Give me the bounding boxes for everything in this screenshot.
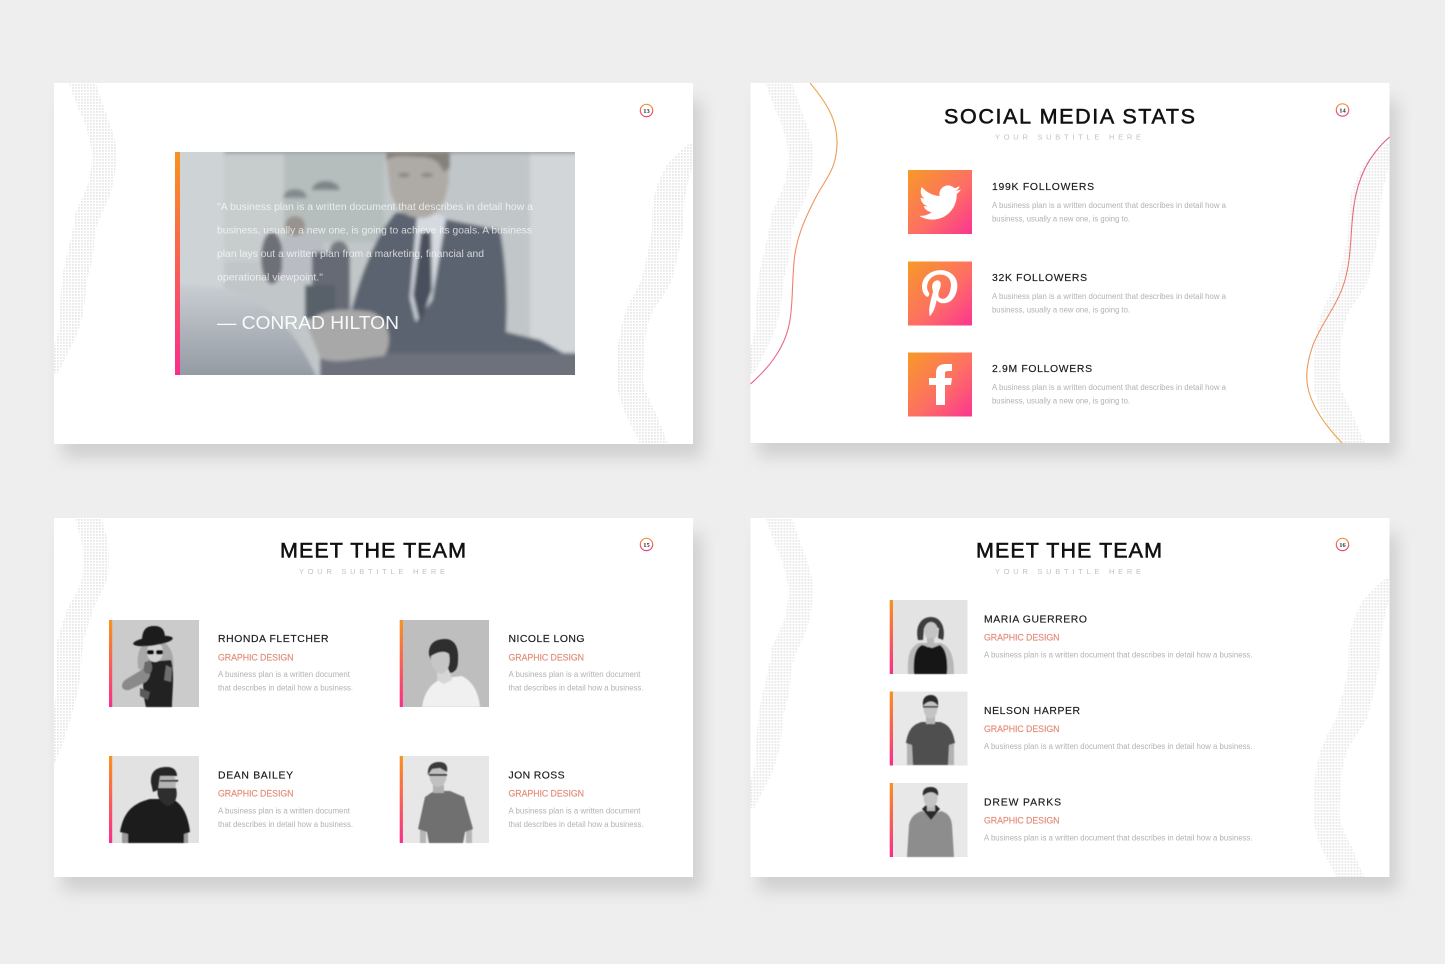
stat: facebook (908, 352, 1227, 416)
page number 14 (1336, 104, 1349, 116)
page number 13 (640, 104, 653, 117)
stat: facebook: A business plan is a written document that describes in detail how a (992, 383, 1227, 392)
icon: facebook (908, 352, 972, 416)
team member: Nicole Long: A business plan is a written document (508, 670, 641, 679)
team member: Rhonda Fletcher: RHONDA FLETCHER (218, 634, 329, 645)
page number 13: 13 (643, 108, 650, 115)
quote text (217, 201, 533, 284)
portrait (112, 620, 199, 707)
team member: Dean Bailey (109, 756, 353, 843)
panel: slide 16 meet the team (750, 518, 1390, 877)
decorative curve right (1307, 137, 1390, 443)
stat: pinterest: 32K FOLLOWERS (992, 273, 1087, 284)
accent bar (890, 600, 893, 674)
accent bar (109, 620, 112, 707)
blurred office photo (180, 152, 575, 375)
portrait (893, 692, 968, 766)
team member: Rhonda Fletcher: GRAPHIC DESIGN (218, 652, 294, 662)
team member: Nelson Harper: GRAPHIC DESIGN (984, 724, 1060, 734)
stat: facebook: 2.9M FOLLOWERS (992, 364, 1092, 375)
stat: facebook: business, usually a new one, is going to. (992, 397, 1130, 406)
subtitle: YOUR SUBTITLE HERE (299, 567, 445, 576)
quote text: operational viewpoint." (217, 272, 323, 284)
team member: Dean Bailey: that describes in detail how a business. (218, 820, 353, 829)
page number 15 (640, 538, 653, 551)
accent bar (890, 692, 893, 766)
team member: Maria Guerrero: MARIA GUERRERO (984, 614, 1087, 625)
stat: twitter: business, usually a new one, is going to. (992, 215, 1130, 224)
heading: SOCIAL MEDIA STATS (944, 105, 1195, 129)
subtitle: YOUR SUBTITLE HERE (995, 132, 1141, 142)
team member: Nicole Long (400, 620, 644, 707)
icon: twitter (908, 170, 972, 234)
quote text: business, usually a new one, is going to achieve its goals. A business (217, 224, 532, 236)
team member: Nelson Harper: NELSON HARPER (984, 706, 1080, 717)
accent bar (400, 620, 403, 707)
team member: Drew Parks: GRAPHIC DESIGN (984, 816, 1060, 826)
team member: Nicole Long: that describes in detail how a business. (508, 684, 644, 693)
quote author: — CONRAD HILTON (217, 312, 399, 333)
team member: Drew Parks: A business plan is a written document that describes in detail how a business. (984, 834, 1252, 843)
icon: pinterest (908, 262, 972, 326)
team member: Maria Guerrero: A business plan is a written document that describes in detail how a business. (984, 651, 1252, 660)
stat: pinterest (908, 262, 1227, 326)
quote card with photo (175, 152, 575, 375)
portrait (402, 620, 489, 707)
quote text: "A business plan is a written document that describes in detail how a (217, 201, 533, 213)
accent bar (109, 756, 112, 843)
team member: Nelson Harper: A business plan is a written document that describes in detail how a business. (984, 742, 1252, 751)
team member: Nicole Long: NICOLE LONG (508, 634, 584, 645)
team member: Jon Ross: that describes in detail how a business. (508, 820, 644, 829)
quote text: plan lays out a written plan from a marketing, financial and (217, 248, 484, 260)
stat: pinterest: business, usually a new one, is going to. (992, 306, 1130, 315)
team member: Jon Ross: JON ROSS (508, 770, 565, 781)
team member: Nelson Harper (890, 692, 1252, 766)
stat: pinterest: A business plan is a written document that describes in detail how a (992, 292, 1227, 301)
portrait (893, 783, 968, 857)
panel: slide 15 meet the team (54, 518, 693, 877)
team member: Jon Ross: A business plan is a written document (508, 807, 641, 816)
stat: twitter: 199K FOLLOWERS (992, 182, 1094, 193)
page number 14: 14 (1339, 107, 1346, 114)
team member: Maria Guerrero (890, 600, 1252, 674)
accent bar (890, 783, 893, 857)
heading: MEET THE TEAM (280, 539, 466, 563)
page number 16: 16 (1339, 542, 1346, 549)
stat: twitter: A business plan is a written document that describes in detail how a (992, 201, 1227, 210)
team member: Drew Parks (890, 783, 1252, 857)
portrait (402, 756, 489, 843)
team member: Rhonda Fletcher (109, 620, 353, 707)
portrait (112, 756, 199, 843)
team member: Rhonda Fletcher: that describes in detail how a business. (218, 684, 353, 693)
team member: Rhonda Fletcher: A business plan is a written document (218, 670, 351, 679)
gradient accent bar (175, 152, 180, 375)
team member: Dean Bailey: DEAN BAILEY (218, 770, 293, 781)
panel: slide 14 social media stats (750, 83, 1390, 443)
team member: Drew Parks: DREW PARKS (984, 797, 1061, 808)
page number 15: 15 (643, 542, 650, 549)
stat: twitter (908, 170, 1227, 234)
page number 16 (1336, 538, 1349, 551)
team member: Maria Guerrero: GRAPHIC DESIGN (984, 632, 1060, 642)
decorative curve left (750, 83, 837, 384)
heading: MEET THE TEAM (976, 539, 1162, 563)
team member: Jon Ross: GRAPHIC DESIGN (508, 788, 584, 798)
team member: Nicole Long: GRAPHIC DESIGN (508, 652, 584, 662)
team member: Dean Bailey: GRAPHIC DESIGN (218, 788, 294, 798)
team member: Dean Bailey: A business plan is a written document (218, 807, 351, 816)
panel: slide 13 quote (54, 83, 693, 444)
team member: Jon Ross (400, 756, 644, 843)
slide shadows (62, 100, 1398, 891)
subtitle: YOUR SUBTITLE HERE (995, 567, 1141, 576)
accent bar (400, 756, 403, 843)
portrait (893, 600, 968, 674)
